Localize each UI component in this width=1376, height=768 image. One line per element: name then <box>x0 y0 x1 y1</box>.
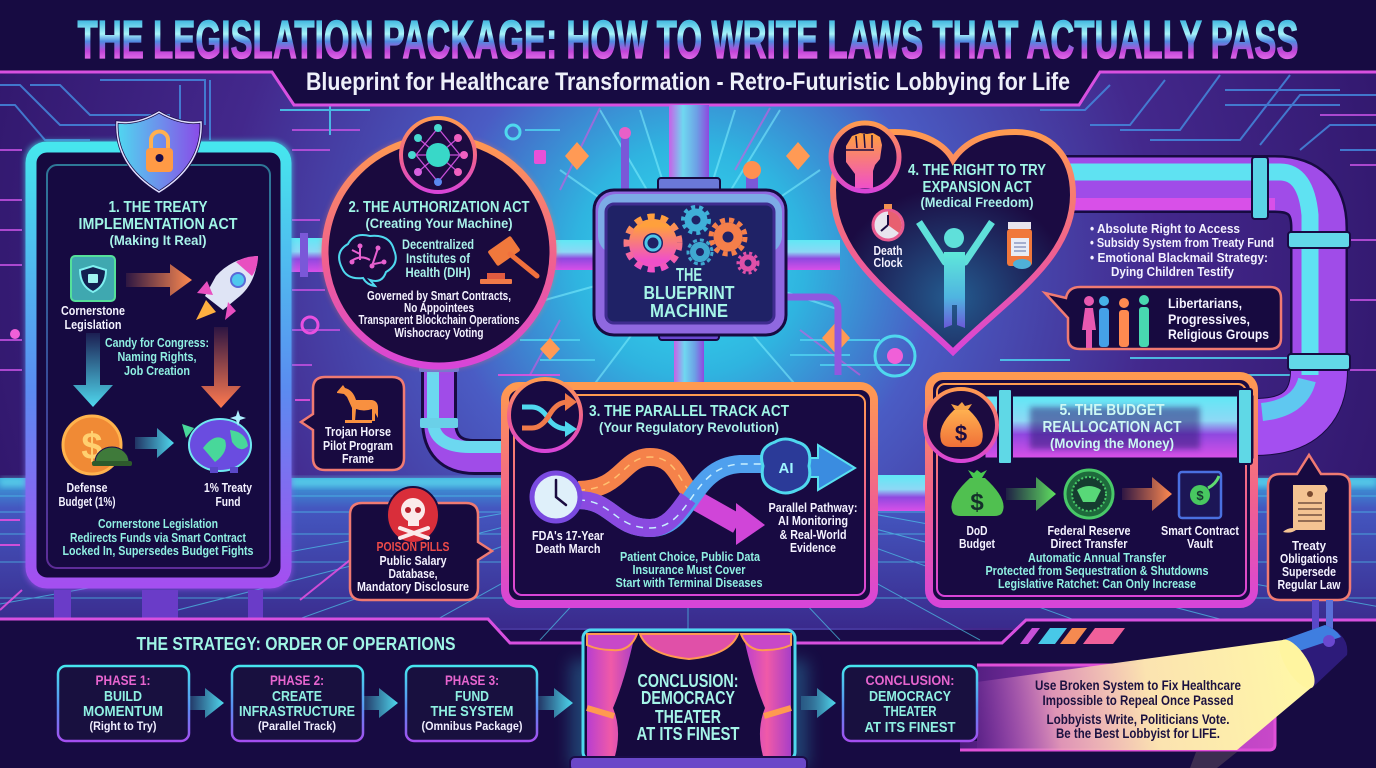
panel 2: authorization act <box>322 118 556 369</box>
icon: defense coin: $ <box>81 426 103 468</box>
machine label: MACHINE <box>650 301 728 321</box>
machine label: THE <box>676 265 702 285</box>
label: fda: Death March <box>536 542 600 556</box>
heading: REALLOCATION ACT <box>1042 419 1182 436</box>
stage text <box>636 671 740 744</box>
bottom band <box>0 619 1376 768</box>
text: summary: Redirects Funds via Smart Contract <box>70 531 247 545</box>
list: right to try bullets: • Subsidy System from Treaty Fund <box>1090 236 1274 250</box>
connecting pipes <box>290 105 1350 511</box>
label: cornerstone legislation <box>61 304 125 332</box>
icon: federal reserve seal <box>1065 470 1113 518</box>
label: cornerstone legislation: Cornerstone <box>61 304 125 318</box>
label: fda <box>532 529 604 556</box>
banner with spotlight <box>960 600 1347 768</box>
label: treaty obligations: Treaty <box>1292 539 1326 553</box>
heading: 3. THE PARALLEL TRACK ACT <box>589 403 789 420</box>
label: parallel pathway: Evidence <box>790 541 836 555</box>
conclusion box: AT ITS FINEST <box>864 719 956 736</box>
label: death clock: Death <box>874 244 902 258</box>
callout: poison pills <box>350 487 492 600</box>
phase 1 box <box>58 666 189 741</box>
text: closing statement: Impossible to Repeal Once Passed <box>1042 693 1234 708</box>
icon: skull <box>387 487 439 543</box>
arrow <box>189 688 224 718</box>
phase 3 box: FUND <box>455 688 489 705</box>
text: DIH: Health (DIH) <box>406 264 470 280</box>
label: dod budget <box>959 524 996 551</box>
text: poison pills <box>357 539 469 594</box>
phase 2 box: PHASE 2: <box>270 672 324 688</box>
panel 4: right to try <box>831 123 1073 352</box>
label: coalition groups: Progressives, <box>1168 311 1250 327</box>
panel 5: budget reallocation act <box>925 376 1254 604</box>
text: closing statement: Be the Best Lobbyist for LIFE. <box>1056 726 1220 741</box>
heading <box>348 199 530 231</box>
arrow: orange right <box>126 264 192 296</box>
icon: defense coin <box>63 416 132 474</box>
label: death clock <box>874 244 903 270</box>
text: closing statement: Use Broken System to Fix Healthcare <box>1035 678 1241 693</box>
subtitle: Blueprint for Healthcare Transformation - Retro-Futuristic Lobbying for Life <box>306 68 1070 96</box>
label: treaty obligations: Obligations <box>1280 552 1338 566</box>
icon: death clock <box>873 204 903 240</box>
text: poison pills: Mandatory Disclosure <box>357 580 469 594</box>
gears <box>627 207 758 273</box>
label: defense budget: Defense <box>66 481 108 495</box>
arrow <box>538 688 573 718</box>
icon: money bag: $ <box>955 421 967 446</box>
icon: money bag <box>925 389 997 461</box>
label: parallel pathway: AI Monitoring <box>778 514 848 528</box>
text: patient choice: Start with Terminal Diseases <box>616 576 763 590</box>
heading: 5. THE BUDGET <box>1060 402 1165 419</box>
phase 2 box: INFRASTRUCTURE <box>239 703 355 720</box>
icon: person <box>919 222 992 328</box>
text: governance: No Appointees <box>404 301 474 315</box>
icon: vault <box>1179 472 1221 518</box>
text: poison pills: Public Salary <box>380 554 447 568</box>
icon: spotlight <box>1273 600 1347 694</box>
phase 2 box <box>232 666 363 741</box>
phase 1 box: BUILD <box>104 688 142 705</box>
icon: brain <box>339 235 396 286</box>
arrow: orange down <box>201 327 241 408</box>
phase 2 box: CREATE <box>272 688 322 705</box>
text: patient choice: Patient Choice, Public Data <box>620 550 761 564</box>
arrow <box>363 688 398 718</box>
text: candy for congress: Naming Rights, <box>118 350 196 364</box>
conclusion box: CONCLUSION: <box>866 672 954 688</box>
icon: shuffle arrows <box>509 379 581 451</box>
phase 3 box: PHASE 3: <box>445 672 499 688</box>
text: governance <box>358 289 520 340</box>
text: governance: Governed by Smart Contracts, <box>367 289 511 303</box>
heading: (Moving the Money) <box>1050 435 1174 451</box>
callout: trojan horse <box>301 377 404 470</box>
text: summary: Cornerstone Legislation <box>98 517 218 531</box>
text: summary: Locked In, Supersedes Budget Fights <box>62 544 254 558</box>
icon: shield <box>117 112 201 192</box>
text: DIH: Institutes of <box>406 250 470 266</box>
label: coalition groups: Libertarians, <box>1168 295 1242 311</box>
heading <box>78 199 238 248</box>
icon: pill bottle <box>1007 222 1032 269</box>
blueprint machine <box>594 190 786 335</box>
text: governance: Wishocracy Voting <box>394 326 484 340</box>
icon: AI brain: AI <box>778 460 794 477</box>
text: protections: Automatic Annual Transfer <box>1028 551 1166 565</box>
label: treaty obligations <box>1278 539 1341 592</box>
heading <box>908 162 1047 210</box>
text: poison pills: POISON PILLS <box>376 539 450 554</box>
stage: conclusion <box>570 630 808 768</box>
text: candy for congress: Job Creation <box>124 364 190 378</box>
icon: horse <box>337 385 378 423</box>
icon: clock <box>532 473 580 521</box>
text: protections: Protected from Sequestration & Shutdowns <box>986 564 1209 578</box>
machine label: BLUEPRINT <box>644 283 735 303</box>
text: poison pills: Database, <box>388 567 438 581</box>
heading <box>1042 402 1182 451</box>
text: protections: Legislative Ratchet: Can Only Increase <box>998 577 1196 591</box>
label: cornerstone legislation: Legislation <box>64 318 122 332</box>
text: candy for congress: Candy for Congress: <box>105 336 209 350</box>
label: dod budget: Budget <box>959 537 996 551</box>
label: treaty fund: 1% Treaty <box>204 481 252 495</box>
icon: rocket <box>196 256 258 320</box>
label: trojan horse <box>323 425 393 466</box>
icon: AI brain <box>762 439 855 493</box>
header band <box>0 0 1376 105</box>
heading: 4. THE RIGHT TO TRY <box>908 162 1047 179</box>
diagram: tracks <box>578 457 775 545</box>
label: defense budget <box>58 481 116 509</box>
arrow: blue down <box>73 333 113 407</box>
label: treaty fund <box>204 481 252 509</box>
curtains <box>587 634 791 756</box>
text: patient choice: Insurance Must Cover <box>632 563 746 577</box>
label: coalition groups: Religious Groups <box>1168 326 1269 342</box>
label: treaty obligations: Regular Law <box>1278 578 1341 592</box>
heading: 1. THE TREATY <box>108 199 208 216</box>
label: parallel pathway <box>768 501 858 555</box>
icon: cornerstone <box>71 256 115 301</box>
machine label <box>644 265 735 321</box>
list: right to try bullets: Dying Children Testify <box>1111 265 1234 279</box>
label: fda: FDA's 17-Year <box>532 529 604 543</box>
phase 3 box: THE SYSTEM <box>430 703 514 720</box>
heading: (Creating Your Machine) <box>366 215 512 231</box>
label: trojan horse: Trojan Horse <box>325 425 391 439</box>
heading: 2. THE AUTHORIZATION ACT <box>348 199 530 216</box>
phase 1 box: PHASE 1: <box>96 672 150 688</box>
heading: (Your Regulatory Revolution) <box>599 419 779 435</box>
heading: (Making It Real) <box>110 232 206 248</box>
label: parallel pathway: & Real-World <box>780 528 846 542</box>
phase 2 box: (Parallel Track) <box>258 719 336 733</box>
label: treaty fund: Fund <box>216 495 240 509</box>
arrow: green <box>1006 477 1056 511</box>
icon: piggy globe <box>182 410 251 473</box>
arrow: orange right <box>1122 477 1172 511</box>
heading: EXPANSION ACT <box>922 179 1032 196</box>
conclusion box <box>843 666 977 741</box>
icon: network <box>401 118 475 192</box>
phase 1 box: (Right to Try) <box>90 719 157 733</box>
text: summary <box>62 517 254 558</box>
callout: coalition <box>1045 287 1281 349</box>
label: death clock: Clock <box>874 256 903 270</box>
label: federal reserve: Direct Transfer <box>1050 537 1128 551</box>
pipe banner <box>985 389 1253 464</box>
label: trojan horse: Pilot Program <box>323 439 393 453</box>
icon: scroll <box>1283 485 1328 533</box>
text: closing statement <box>1035 678 1241 741</box>
text: patient choice <box>616 550 763 590</box>
panel 3: parallel track act <box>505 379 874 604</box>
label: defense budget: Budget (1%) <box>58 495 116 509</box>
stage text: CONCLUSION: <box>638 671 738 691</box>
heading <box>589 403 789 435</box>
list: right to try bullets: • Absolute Right to Access <box>1090 222 1240 236</box>
icon: fist <box>831 123 899 191</box>
strategy heading: THE STRATEGY: ORDER OF OPERATIONS <box>136 634 456 654</box>
label: parallel pathway: Parallel Pathway: <box>768 501 858 515</box>
icon: green money bag: $ <box>970 489 984 516</box>
icon: gavel <box>480 236 537 284</box>
list: right to try bullets: • Emotional Blackmail Strategy: <box>1090 251 1268 265</box>
stage text: DEMOCRACY <box>641 688 735 708</box>
big pipe <box>1000 157 1350 427</box>
icon: people <box>1082 295 1149 348</box>
arrow <box>801 688 836 718</box>
label: coalition groups <box>1168 295 1269 342</box>
stage text: AT ITS FINEST <box>636 724 740 744</box>
label: federal reserve <box>1048 524 1131 551</box>
icon: green money bag <box>951 470 1004 516</box>
callout: treaty obligations <box>1268 455 1350 600</box>
icon: vault: $ <box>1196 488 1204 503</box>
label: treaty obligations: Supersede <box>1282 565 1336 579</box>
label: dod budget: DoD <box>966 524 988 538</box>
conclusion box: DEMOCRACY <box>869 688 951 705</box>
conclusion box: THEATER <box>884 703 937 720</box>
label: smart contract vault <box>1161 524 1240 551</box>
list: right to try bullets <box>1090 222 1274 279</box>
text: closing statement: Lobbyists Write, Politicians Vote. <box>1046 712 1230 727</box>
text: DIH <box>402 236 474 280</box>
phase 3 box <box>406 666 537 741</box>
label: smart contract vault: Vault <box>1187 537 1214 551</box>
stage text: THEATER <box>655 707 721 727</box>
text: protections <box>986 551 1209 591</box>
text: candy for congress <box>105 336 209 378</box>
panel 1: treaty implementation act <box>25 112 292 619</box>
phase 1 box: MOMENTUM <box>83 703 163 720</box>
text: DIH: Decentralized <box>402 236 474 252</box>
arrow: blue right <box>135 428 174 458</box>
heading: (Medical Freedom) <box>920 194 1034 210</box>
label: federal reserve: Federal Reserve <box>1048 524 1131 538</box>
label: smart contract vault: Smart Contract <box>1161 524 1240 538</box>
heading: IMPLEMENTATION ACT <box>78 216 238 233</box>
phase 3 box: (Omnibus Package) <box>422 719 523 733</box>
text: governance: Transparent Blockchain Operations <box>358 313 520 327</box>
label: trojan horse: Frame <box>342 452 374 466</box>
